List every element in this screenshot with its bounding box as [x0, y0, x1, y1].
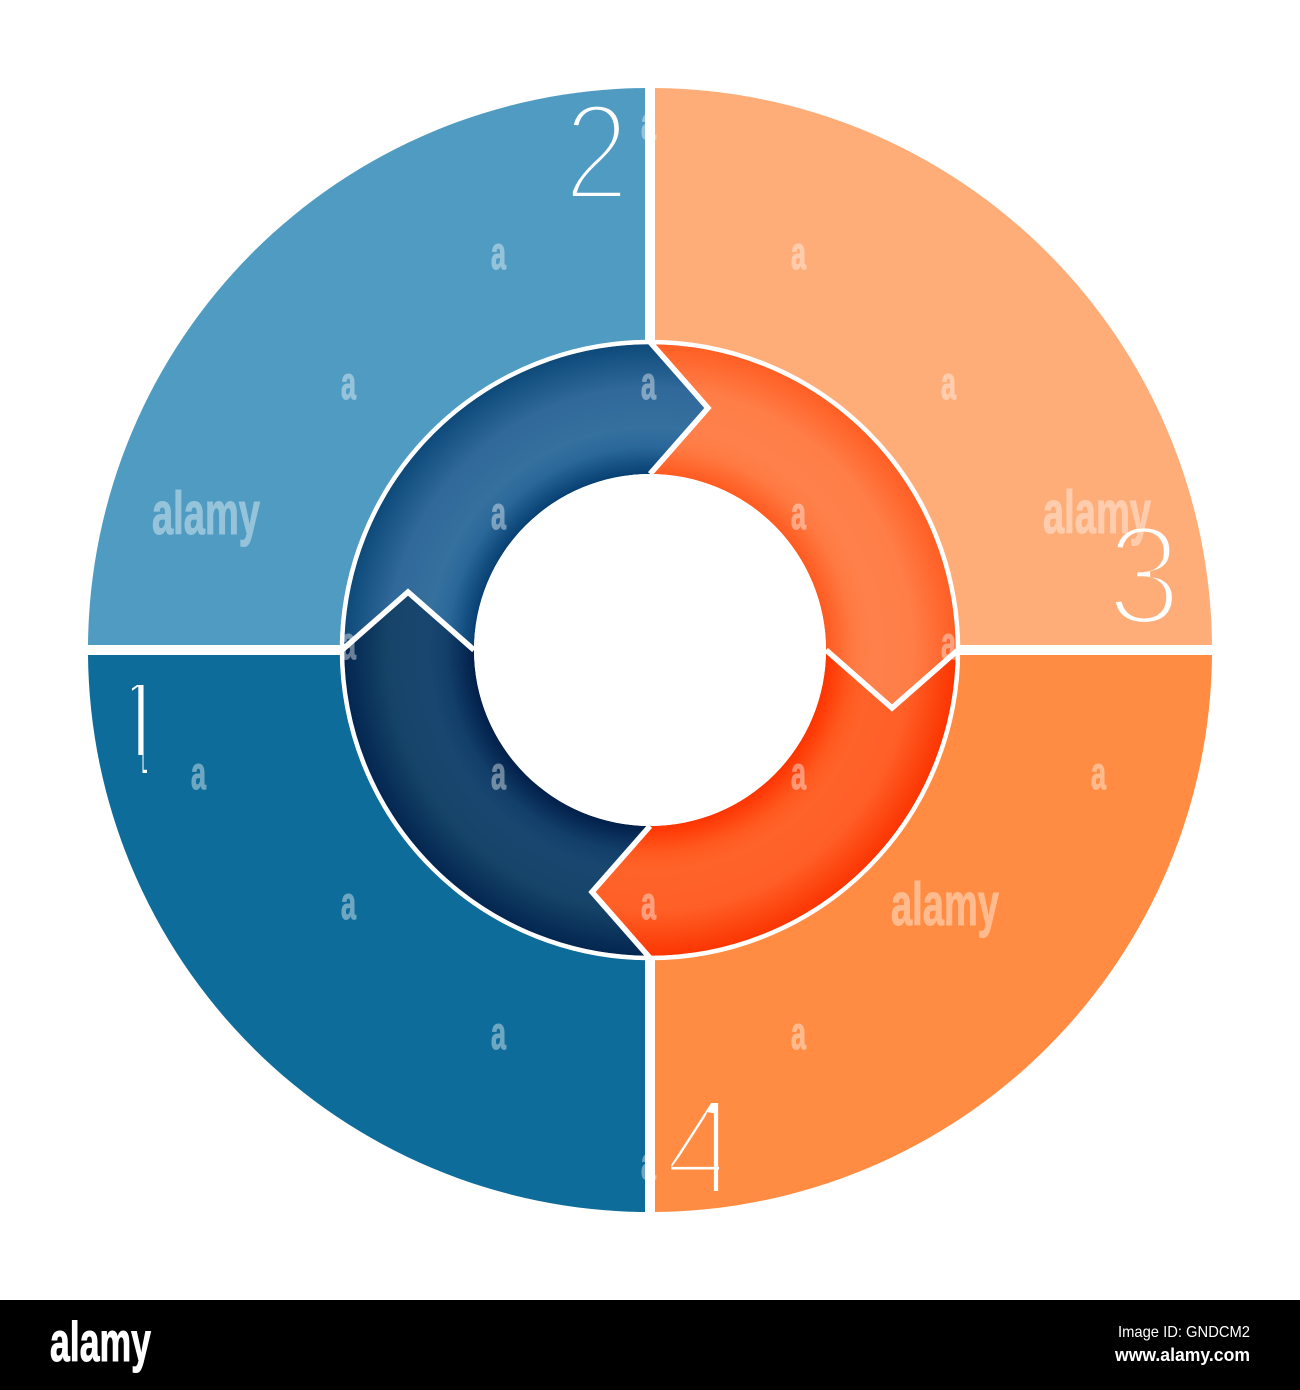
- watermark letters: a: [641, 357, 656, 409]
- watermark letters: a: [791, 487, 806, 539]
- watermark word left: alamy: [152, 480, 260, 547]
- footer bar: [0, 1300, 1300, 1390]
- watermark letters: a: [491, 747, 506, 799]
- panel: quadrant 3 light orange: [655, 88, 1212, 645]
- footer url: www.alamy.com: [1114, 1345, 1250, 1365]
- watermark letters: a: [341, 617, 356, 669]
- number 4: 4: [665, 1070, 738, 1224]
- footer logo: alamy: [50, 1310, 151, 1373]
- watermark letters: a: [641, 1137, 656, 1189]
- watermark letters: a: [941, 617, 956, 669]
- watermark letters: a: [791, 1007, 806, 1059]
- watermark letters: a: [1091, 747, 1106, 799]
- panel: quadrant 1 dark blue: [88, 655, 645, 1212]
- arrow segment 1 navy: [344, 592, 650, 956]
- watermark letters: a: [491, 1007, 506, 1059]
- watermark letters: a: [491, 227, 506, 279]
- watermark letters: a: [491, 487, 506, 539]
- watermark word right: alamy: [1043, 479, 1151, 546]
- arrow segment 2 blue: [344, 344, 708, 650]
- watermark letters: a: [641, 877, 656, 929]
- panel: quadrant 2 light blue: [88, 88, 645, 645]
- watermark letters: a: [341, 877, 356, 929]
- centre hole: [474, 474, 826, 826]
- arrow segment 3 orange: [650, 344, 956, 708]
- watermark letters: a: [791, 747, 806, 799]
- ring backing disc: [340, 340, 960, 960]
- watermark letters: a: [641, 97, 656, 149]
- watermark letters: a: [341, 357, 356, 409]
- arrow segment 4 red orange: [592, 650, 956, 956]
- watermark letters: a: [191, 747, 206, 799]
- number 1: 1: [100, 652, 177, 806]
- watermark letters: a: [941, 357, 956, 409]
- watermark letters: a: [791, 227, 806, 279]
- footer image id: Image ID: GNDCM2: [1118, 1324, 1250, 1341]
- watermark letters: [191, 97, 1106, 1189]
- arrow dividers: [342, 342, 958, 958]
- watermark word bottom: alamy: [891, 871, 999, 938]
- panel: quadrant 4 orange: [655, 655, 1212, 1212]
- ring outline: [342, 342, 958, 958]
- number 3: 3: [1107, 496, 1181, 655]
- number 2: 2: [564, 76, 629, 230]
